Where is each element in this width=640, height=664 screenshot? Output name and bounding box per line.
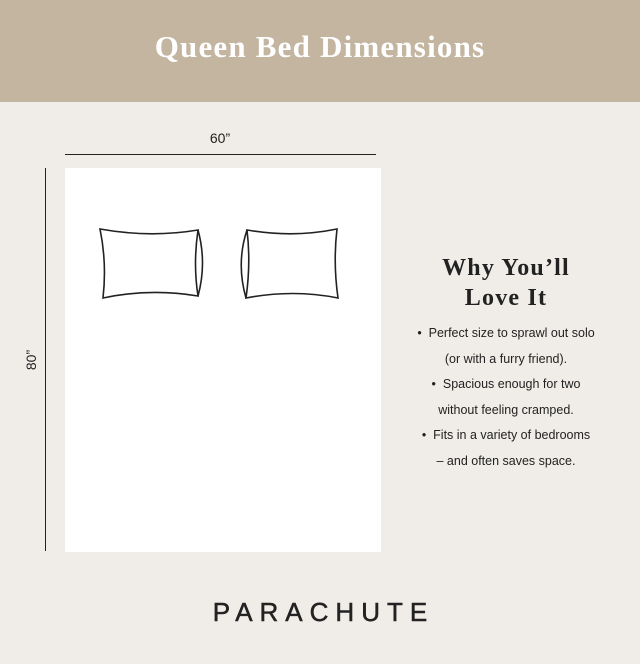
height label 80": 80” — [23, 350, 39, 370]
bullet list: – and often saves space. — [436, 454, 575, 468]
title: Queen Bed Dimensions — [155, 29, 485, 64]
bullet list: (or with a furry friend). — [445, 352, 567, 366]
bed mattress — [65, 168, 381, 552]
heading: why you'll love it: Why You’ll — [442, 255, 570, 281]
bullet list: • Fits in a variety of bedrooms — [422, 428, 590, 442]
bullet list: without feeling cramped. — [438, 402, 574, 416]
pillows — [99, 228, 339, 299]
heading: why you'll love it: Love It — [465, 285, 547, 311]
heading: why you'll love it — [442, 255, 570, 311]
width dimension line — [65, 154, 376, 155]
bullet list — [417, 326, 595, 468]
pillow left — [100, 229, 202, 298]
bullet list: • Perfect size to sprawl out solo — [417, 326, 595, 340]
height dimension line — [45, 168, 46, 551]
bullet list: • Spacious enough for two — [432, 377, 580, 391]
logo PARACHUTE: PARACHUTE — [213, 597, 434, 627]
width label 60": 60” — [210, 130, 230, 146]
header banner — [0, 0, 640, 102]
pillow right — [241, 229, 338, 298]
